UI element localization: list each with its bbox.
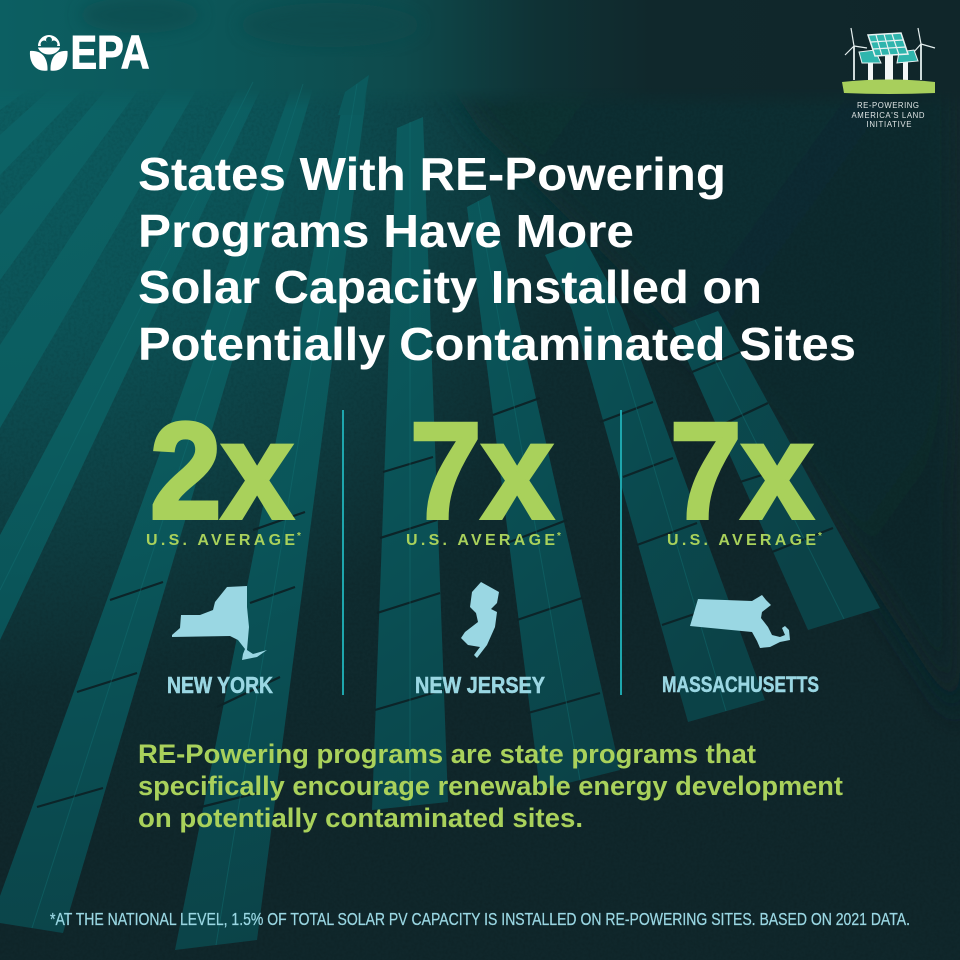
logo: RE-Powering America's Land Initiative (842, 28, 935, 129)
label: U.S. average: U.S. AVERAGE (146, 532, 295, 549)
text: initiative name (852, 101, 925, 129)
text: initiative name: RE-POWERING (857, 101, 919, 110)
icon: New York state map (172, 586, 267, 660)
label: U.S. average: U.S. AVERAGE (406, 532, 555, 549)
stat: 2x: 2x (150, 395, 293, 548)
text block: program description (138, 739, 843, 833)
title (138, 148, 856, 370)
text block: program description: on potentially contaminated sites. (138, 803, 583, 833)
logo: EPA (30, 26, 150, 78)
title: Solar Capacity Installed on (138, 261, 762, 313)
stat: 7x: 7x (410, 395, 553, 548)
icon: EPA flower (30, 35, 68, 71)
text: initiative name: AMERICA'S LAND (852, 111, 925, 120)
icon: wind turbines (845, 28, 935, 80)
panel: New York (146, 395, 301, 698)
asterisk: * (297, 531, 301, 542)
label: New Jersey: NEW JERSEY (415, 672, 545, 698)
label: U.S. average: U.S. AVERAGE (667, 532, 816, 549)
icon: New Jersey state map (461, 582, 499, 658)
label: New York: NEW YORK (167, 672, 273, 698)
panel: Massachusetts (662, 395, 822, 697)
divider (342, 410, 344, 695)
text: initiative name: INITIATIVE (866, 120, 912, 129)
text block: program description: specifically encourage renewable energy development (138, 771, 843, 801)
stat: 7x: 7x (670, 395, 813, 548)
asterisk: * (557, 531, 561, 542)
icon: solar panels (859, 33, 918, 81)
divider (620, 410, 622, 695)
title: Potentially Contaminated Sites (138, 318, 856, 370)
icon: grass (842, 80, 935, 94)
title: States With RE-Powering (138, 148, 726, 200)
text block: program description: RE-Powering programs are state programs that (138, 739, 756, 769)
panel: New Jersey (406, 395, 561, 698)
asterisk: * (818, 531, 822, 542)
title: Programs Have More (138, 205, 634, 257)
icon: Massachusetts state map (690, 595, 790, 648)
label: Massachusetts: MASSACHUSETTS (662, 672, 819, 697)
text: EPA: EPA (70, 26, 150, 78)
